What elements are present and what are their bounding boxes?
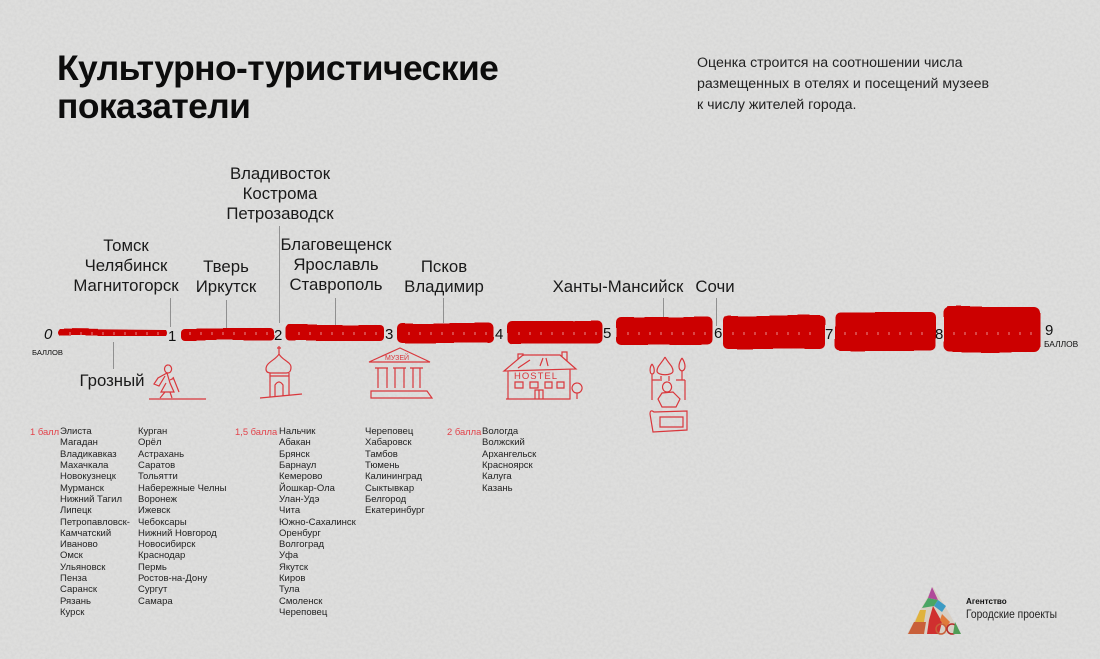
scale numbers: 5: [603, 325, 611, 342]
city list 1 b: Ижевск: [138, 505, 170, 516]
city list 1 a: Курск: [60, 607, 84, 618]
city labels above 3.5: [404, 257, 484, 296]
icon: chapel: [260, 346, 302, 398]
city list 1 b: Самара: [138, 596, 173, 607]
city list 1 b: Пермь: [138, 562, 167, 573]
city list 1 b: Нижний Новгород: [138, 528, 217, 539]
city labels above 2: Петрозаводск: [226, 204, 334, 223]
red bars: [58, 307, 1040, 352]
city list 2: Архангельск: [482, 449, 536, 460]
scale numbers: БАЛЛОВ: [1044, 339, 1079, 349]
city list 1 b: Курган: [138, 426, 167, 437]
city labels above 2: Кострома: [243, 184, 317, 203]
city list 1.5 b: Калининград: [365, 471, 422, 482]
city list 1 b: Сургут: [138, 584, 167, 595]
city list 1 a: Рязань: [60, 596, 91, 607]
city list 1 b: Воронеж: [138, 494, 177, 505]
description text: Оценка строится на соотношении числа: [697, 55, 963, 71]
score label 1.5: 1,5 балла: [235, 426, 277, 437]
city labels above 2.5: Ярославль: [293, 255, 379, 274]
city labels above 3.5: Владимир: [404, 277, 484, 296]
icon: hostel: [504, 352, 582, 399]
city labels above 2: [226, 164, 334, 223]
city list 2: Казань: [482, 483, 513, 494]
city list 1.5 a: Брянск: [279, 449, 310, 460]
icon: tourist with church: [650, 357, 687, 432]
city list 1.5 a: Киров: [279, 573, 305, 584]
description text: размещенных в отелях и посещений музеев: [697, 76, 989, 92]
city list 1.5 b: Екатеринбург: [365, 505, 425, 516]
city list 1 b: [138, 426, 226, 607]
description text: к числу жителей города.: [697, 97, 856, 113]
city list 1.5 a: Южно-Сахалинск: [279, 516, 356, 528]
city labels above 1: [73, 236, 179, 295]
scale numbers: 2: [274, 327, 282, 344]
scale numbers: 8: [935, 326, 943, 343]
city list 2: Вологда: [482, 426, 518, 437]
city list 1 a: Липецк: [60, 505, 92, 516]
city list 1.5 b: Тамбов: [365, 449, 398, 460]
city list 1 b: Набережные Челны: [138, 483, 226, 494]
city list 1 a: Иваново: [60, 539, 98, 550]
scale numbers: 1: [168, 328, 176, 345]
city list 1 a: Элиста: [60, 426, 92, 437]
city list 1.5 b: Сыктывкар: [365, 483, 414, 494]
city labels above 1: Магнитогорск: [73, 276, 179, 295]
city list 1.5 a: Чита: [279, 505, 300, 516]
description text: [697, 55, 989, 113]
city list 1 a: Саранск: [60, 584, 97, 595]
scale numbers: 7: [825, 326, 833, 343]
city list 1.5 b: [365, 426, 425, 516]
city list 1.5 a: Йошкар-Ола: [279, 483, 335, 494]
scale numbers: 0: [44, 326, 53, 343]
city list 1.5 a: Уфа: [279, 550, 298, 561]
city list 1 a: Пенза: [60, 573, 87, 584]
title: [57, 48, 498, 126]
city list 1.5 b: Череповец: [365, 426, 413, 437]
city labels above 2.5: Ставрополь: [289, 275, 383, 294]
city list 1 a: Нижний Тагил: [60, 494, 122, 505]
city list 1.5 a: Тула: [279, 584, 300, 595]
city list 1.5 a: Улан-Удэ: [279, 494, 319, 505]
city labels above 1: Челябинск: [85, 256, 167, 275]
scale numbers: 6: [714, 325, 722, 342]
scale numbers: 3: [385, 326, 393, 343]
title: показатели: [57, 86, 250, 126]
city list 1 b: Чебоксары: [138, 516, 187, 528]
city labels above 1: Томск: [103, 236, 149, 255]
city list 1.5 a: Нальчик: [279, 426, 315, 437]
scale numbers: [32, 322, 1079, 357]
city list 1.5 a: [279, 426, 356, 618]
city labels above 1.5: Тверь: [203, 257, 249, 276]
label Sochi: Сочи: [695, 277, 735, 296]
label Khanty-Mansiysk: Ханты-Мансийск: [553, 277, 683, 296]
agency name line 2: Городские проекты: [966, 608, 1057, 621]
city list 1 a: Мурманск: [60, 483, 104, 494]
city list 2: Волжский: [482, 437, 525, 448]
city list 1 b: Краснодар: [138, 550, 185, 561]
scale numbers: БАЛЛОВ: [32, 348, 63, 357]
icon: hiker: [149, 365, 206, 399]
city list 2: Калуга: [482, 471, 512, 482]
city list 1 a: Камчатский: [60, 528, 111, 539]
title: Культурно-туристические: [57, 48, 498, 88]
city list 1.5 a: Смоленск: [279, 596, 322, 607]
city labels above 1.5: [196, 257, 256, 296]
bar tick marks: [70, 332, 1031, 335]
city list 1 a: Петропавловск-: [60, 516, 130, 528]
city list 1 a: Махачкала: [60, 460, 108, 471]
score label 2: 2 балла: [447, 426, 481, 437]
city list 1.5 a: Оренбург: [279, 528, 321, 539]
city labels above 2: Владивосток: [230, 164, 330, 183]
city list 1.5 b: Белгород: [365, 494, 406, 505]
score label 1: 1 балл: [30, 426, 59, 437]
city labels above 2.5: [280, 235, 392, 294]
city labels above 3.5: Псков: [421, 257, 467, 276]
city list 1 b: Тольятти: [138, 471, 178, 482]
label Grozny: Грозный: [79, 371, 145, 390]
icon: museum: МУЗЕЙ: [385, 353, 409, 362]
city labels above 1.5: Иркутск: [196, 277, 256, 296]
city list 1 b: Новосибирск: [138, 539, 195, 550]
city list 1 a: Ульяновск: [60, 562, 105, 573]
agency name: Агентство: [966, 597, 1007, 606]
city list 1.5 a: Абакан: [279, 437, 311, 448]
city list 1 b: Астрахань: [138, 449, 184, 460]
scale numbers: 9: [1045, 322, 1053, 339]
city list 1.5 a: Якутск: [279, 562, 308, 573]
city list 1 b: Орёл: [138, 437, 162, 448]
city list 1 b: Саратов: [138, 460, 175, 471]
icon: hostel: HOSTEL: [514, 371, 558, 382]
city list 1 a: Магадан: [60, 437, 98, 448]
city list 1.5 a: Барнаул: [279, 460, 316, 471]
icon: museum: [369, 348, 432, 398]
leader lines: [114, 226, 716, 369]
city list 1.5 a: Череповец: [279, 607, 327, 618]
scale numbers: 4: [495, 326, 503, 343]
city list 1.5 b: Тюмень: [365, 460, 399, 471]
city list 1 a: Новокузнецк: [60, 471, 116, 482]
city list 1 b: Ростов-на-Дону: [138, 573, 207, 584]
city list 1.5 b: Хабаровск: [365, 437, 412, 448]
city list 1.5 a: Волгоград: [279, 539, 324, 550]
city list 1 a: Владикавказ: [60, 449, 117, 460]
city list 1 a: Омск: [60, 550, 83, 561]
city list 1 a: [60, 426, 130, 618]
city labels above 2.5: Благовещенск: [280, 235, 392, 254]
city list 2: Красноярск: [482, 460, 533, 471]
city list 2: [482, 426, 536, 494]
city list 1.5 a: Кемерово: [279, 471, 322, 482]
